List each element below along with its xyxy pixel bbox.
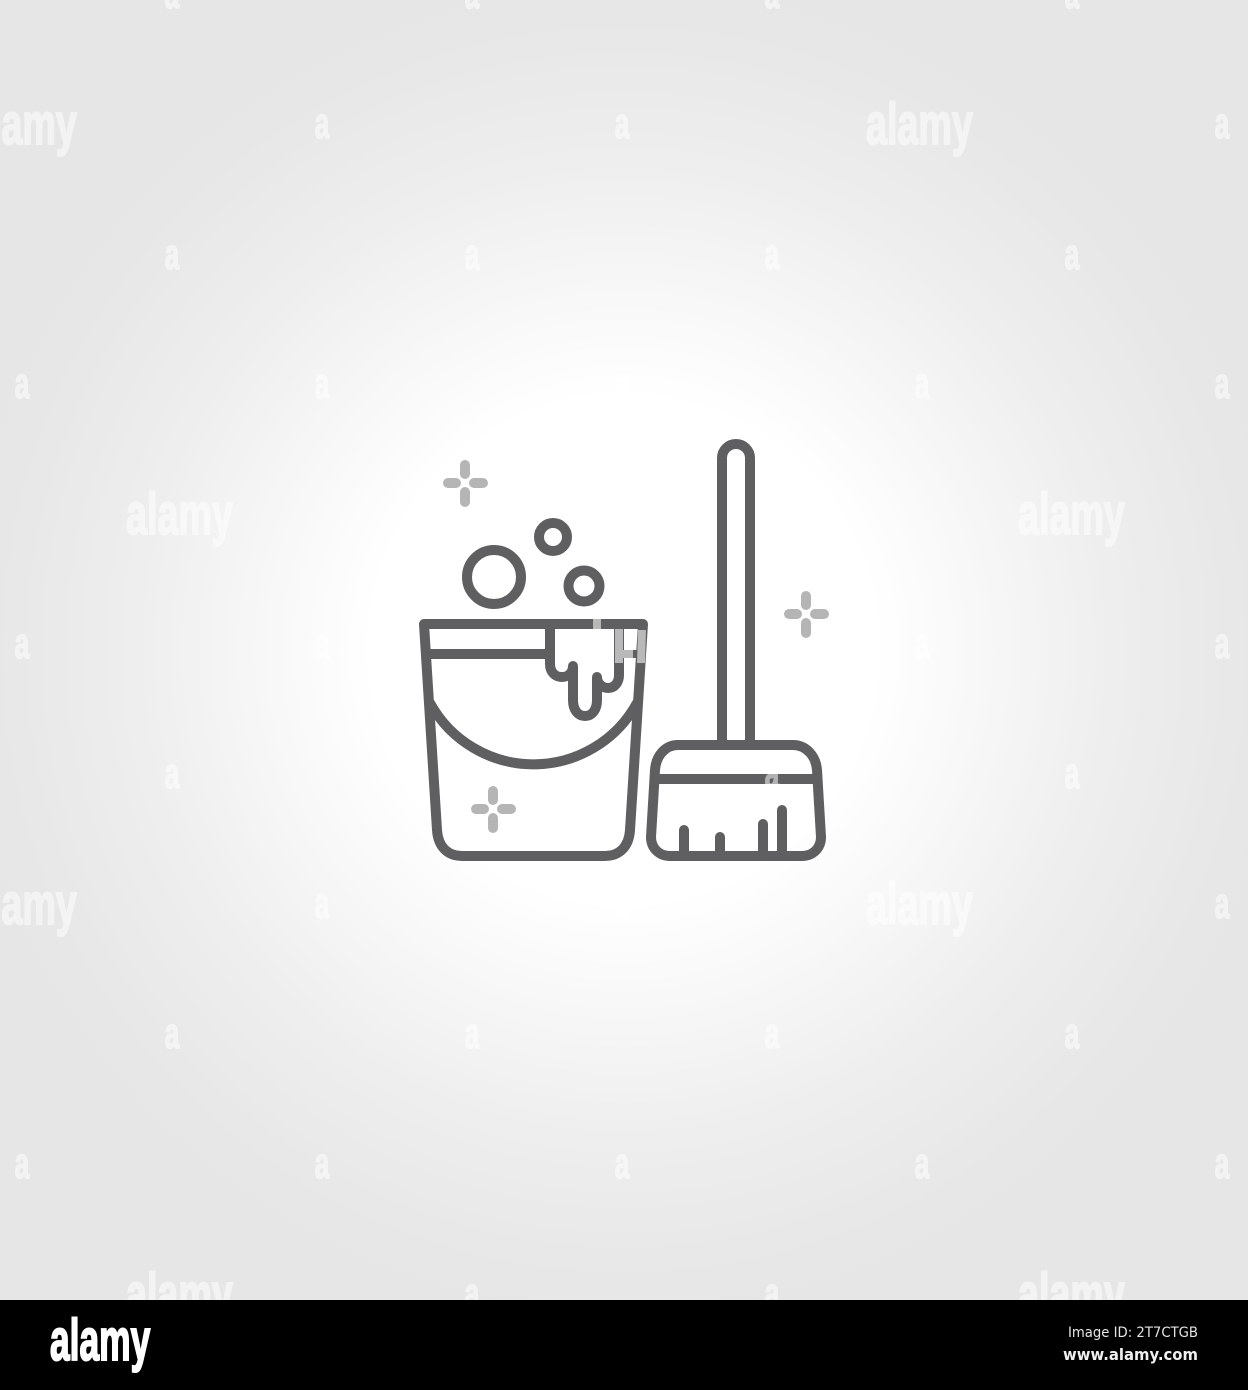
icon: bucket xyxy=(424,624,643,856)
watermark letters: a xyxy=(1065,229,1080,279)
watermark letters: a xyxy=(915,1138,930,1188)
icon: sparkle right xyxy=(789,596,824,633)
icon: bubbles xyxy=(467,523,600,604)
watermark letters: a xyxy=(765,229,780,279)
footer bar xyxy=(0,1300,1248,1390)
icon: broom head xyxy=(651,745,821,856)
watermark letters: a xyxy=(165,1008,180,1058)
watermark letters: a xyxy=(15,1138,30,1188)
watermark words: alamy xyxy=(866,873,973,937)
watermark letters: a xyxy=(465,1008,480,1058)
watermark letters: a xyxy=(915,618,930,668)
website: www.alamy.com xyxy=(1063,1345,1198,1364)
watermark letters: a xyxy=(315,98,330,148)
watermark letters: a xyxy=(1065,748,1080,798)
watermark letters: a xyxy=(615,98,630,148)
band segment right of cloth xyxy=(623,650,638,658)
icon: sparkle on bucket xyxy=(476,791,511,828)
watermark letters: a xyxy=(1215,1138,1230,1188)
icon: sparkle top left xyxy=(448,465,483,502)
image id: Image ID: 2T7CTGB xyxy=(1068,1325,1198,1341)
watermark letters: a xyxy=(465,229,480,279)
watermark words: alamy xyxy=(1018,1263,1125,1327)
watermark letters: a xyxy=(1215,358,1230,408)
watermark letters: a xyxy=(1065,1008,1080,1058)
watermark letters: a xyxy=(765,1268,780,1318)
watermark letters: a xyxy=(465,748,480,798)
watermark letters: a xyxy=(315,618,330,668)
watermark letters: a xyxy=(165,229,180,279)
watermark words: alamy xyxy=(126,483,233,547)
footer logo: alamy xyxy=(50,1309,151,1373)
icon: cloth over bucket rim xyxy=(550,624,619,716)
watermark over bucket rim xyxy=(593,619,646,663)
watermark letters: a xyxy=(315,878,330,928)
watermark letters: a xyxy=(615,358,630,408)
bucket and broom icon xyxy=(424,444,821,856)
icon: broom handle xyxy=(722,444,750,745)
watermark words: alamy xyxy=(866,93,973,157)
watermark letters: a xyxy=(1215,98,1230,148)
watermark letters: a xyxy=(1215,618,1230,668)
watermark letters: a xyxy=(315,358,330,408)
watermark words: alamy xyxy=(126,1263,233,1327)
watermark letters: a xyxy=(165,748,180,798)
watermark words: alamy xyxy=(1018,483,1125,547)
watermark letters: a xyxy=(615,1138,630,1188)
sparkles xyxy=(448,465,824,828)
watermark letters: a xyxy=(765,1008,780,1058)
watermark letters: a xyxy=(615,878,630,928)
watermark letters: a xyxy=(15,358,30,408)
watermark letters: a xyxy=(915,358,930,408)
watermark letters: a xyxy=(315,1138,330,1188)
watermark letters: a xyxy=(465,1268,480,1318)
watermark letters: a xyxy=(765,748,780,798)
watermark letters: a xyxy=(15,618,30,668)
watermark letters: a xyxy=(1215,878,1230,928)
